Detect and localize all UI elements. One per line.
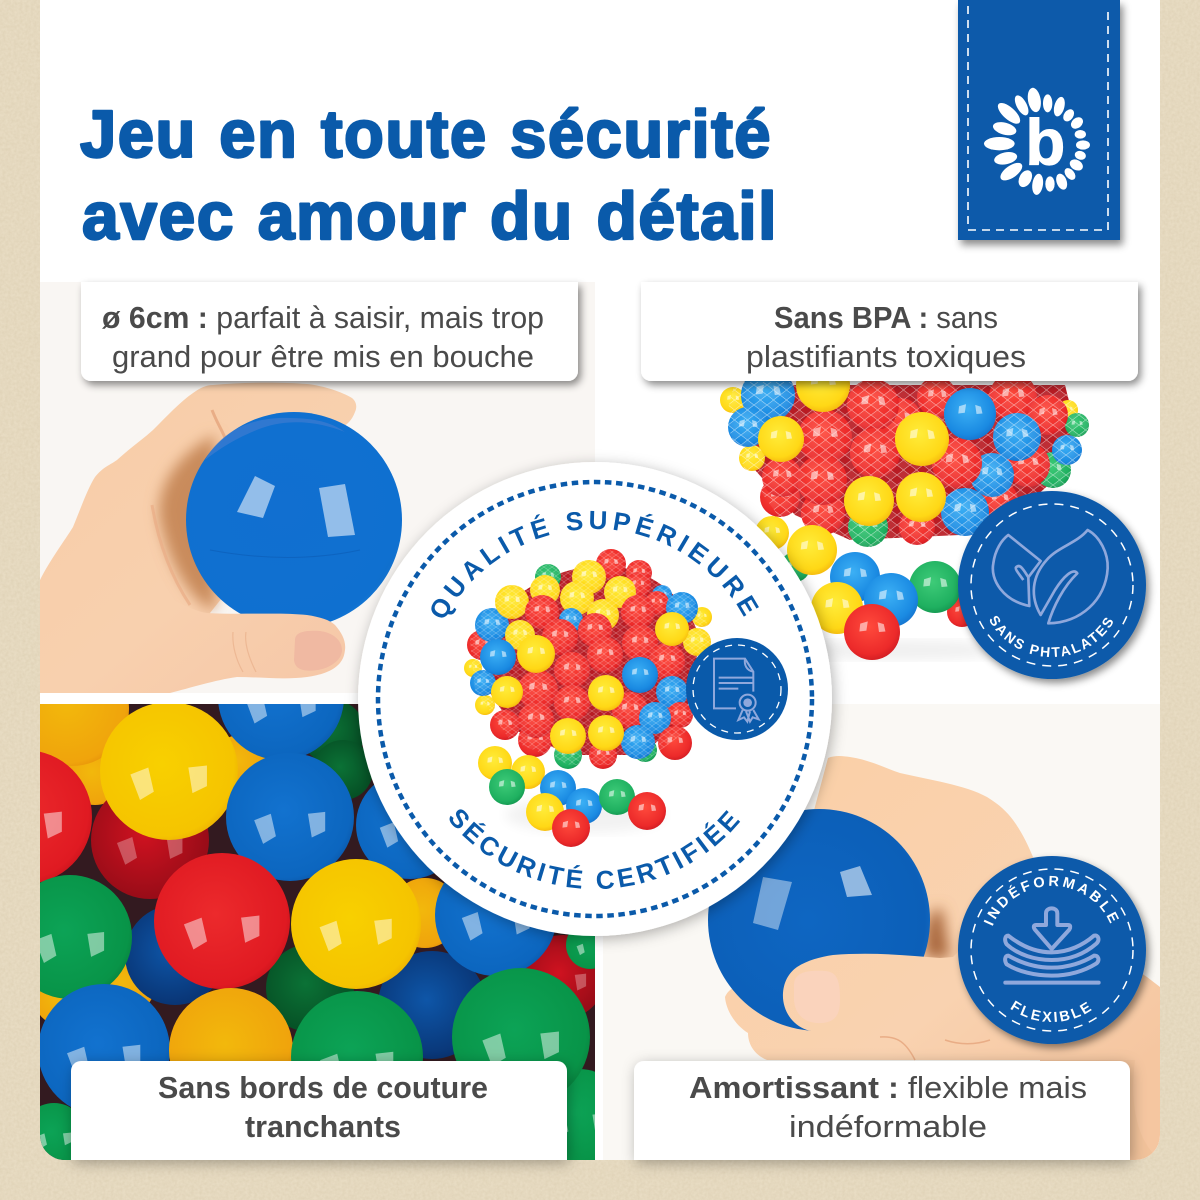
loose balls — [478, 746, 666, 847]
label: cushioning — [634, 1061, 1130, 1160]
palm shadow — [925, 909, 950, 958]
net pile — [720, 381, 1089, 547]
hand — [725, 756, 1160, 1160]
central quality seal — [352, 457, 842, 947]
badge: certificate — [686, 638, 788, 740]
panel: bottom-left photo, ball close-up — [40, 704, 595, 1160]
label: no sharp seams — [71, 1061, 567, 1160]
badge: sans phtalates — [956, 490, 1154, 688]
title: Jeu en toute sécurité — [80, 97, 772, 172]
close-up balls — [0, 634, 627, 1167]
label: ball diameter: ø 6cm : parfait à saisir, mais trop — [102, 300, 544, 335]
label: BPA free: Sans BPA : sans — [774, 300, 998, 335]
label: BPA free: plastifiants toxiques — [746, 339, 1026, 374]
label: no sharp seams: tranchants — [245, 1109, 401, 1144]
ball pile in net — [464, 549, 712, 769]
badge text top: INDÉFORMABLE — [984, 876, 1119, 926]
blue ball — [708, 809, 930, 1031]
label: no sharp seams: Sans bords de couture — [158, 1070, 488, 1105]
hand — [40, 382, 356, 614]
badge text: SANS PHTALATES — [990, 616, 1113, 657]
thumbnail — [794, 971, 840, 1023]
loose balls — [755, 516, 977, 660]
blue ball — [186, 412, 402, 628]
palm shadow between fingers — [159, 435, 215, 610]
label: BPA free — [641, 282, 1138, 381]
thumb — [782, 953, 958, 1031]
label: ball diameter: grand pour être mis en bouche — [112, 339, 534, 374]
icon: certificate — [714, 659, 759, 722]
thumb — [170, 612, 346, 693]
badge: flexible and shape-retaining — [956, 854, 1154, 1054]
label: cushioning: Amortissant : flexible mais — [689, 1070, 1087, 1105]
brand tag with logo — [958, 0, 1120, 240]
thumbnail — [294, 631, 342, 671]
icon: compression arrow — [1005, 908, 1099, 983]
icon: leaves — [993, 530, 1108, 623]
panel: bottom-right photo, hand squeezing ball — [603, 704, 1160, 1160]
label: cushioning: indéformable — [789, 1109, 987, 1144]
badge text bottom: FLEXIBLE — [1010, 1000, 1092, 1022]
panel: top-right photo, ball pile in net — [720, 358, 1090, 660]
panel: top-left photo, hand holding ball — [40, 282, 595, 693]
title: avec amour du détail — [82, 179, 778, 254]
icon: brand flower logo — [984, 87, 1090, 196]
seal text bottom: SÉCURITÉ CERTIFIÉE — [450, 809, 740, 889]
icon: brand flower logo: b — [1025, 105, 1065, 178]
title — [80, 97, 778, 254]
seal text top: QUALITÉ SUPÉRIEURE — [431, 510, 759, 618]
label: ball diameter — [81, 282, 578, 381]
